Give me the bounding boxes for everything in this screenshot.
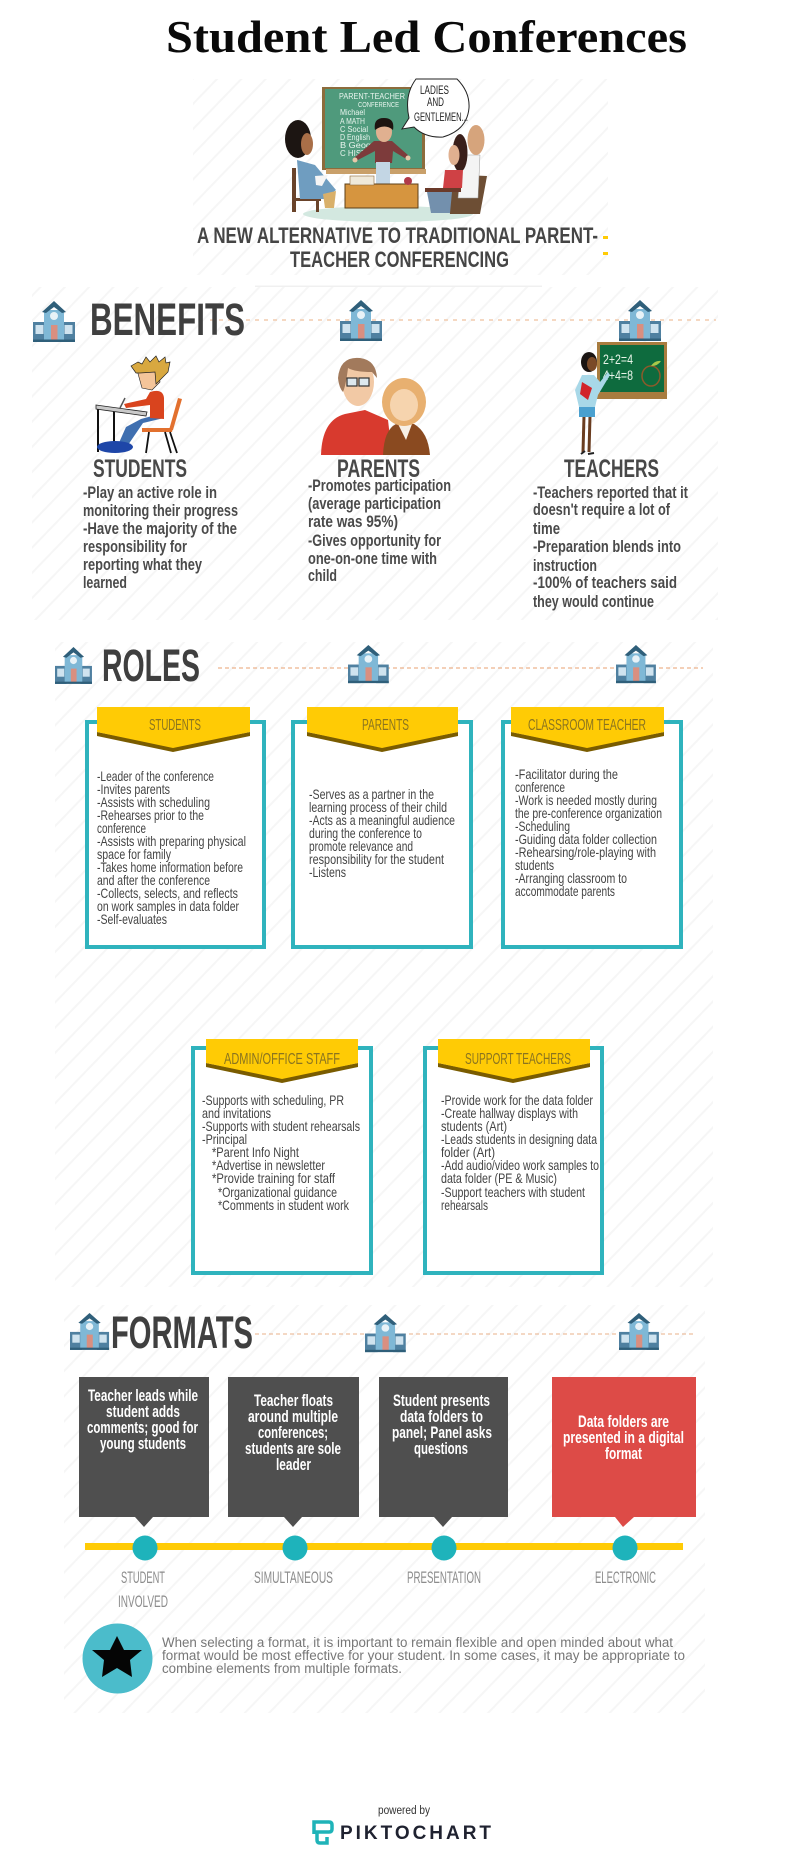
box: teacher floats: conferences;: [258, 1423, 328, 1442]
illustration: teacher at chalkboard: 2+2=4: [603, 351, 633, 367]
illustration: student presenting to parents and teacher: CONFERENCE: [358, 102, 399, 109]
card: parents: -Listens: [309, 864, 346, 880]
illustration: student presenting to parents and teacher: C HIST: [340, 149, 366, 158]
column: teachers: doesn't require a lot of: [533, 500, 670, 519]
timeline: SIMULTANEOUS: [254, 1569, 333, 1587]
icon: star badge: [82, 1624, 152, 1694]
card: admin/office staff: and invitations: [202, 1105, 271, 1121]
card: admin/office staff: *Parent Info Night: [212, 1144, 299, 1160]
card: admin/office staff: *Provide training for staff: [212, 1170, 335, 1186]
card: students: space for family: [97, 846, 171, 862]
box: digital format: presented in a digital: [563, 1428, 684, 1447]
heading: formats: FORMATS: [111, 1307, 253, 1358]
card: classroom teacher: accommodate parents: [515, 883, 615, 899]
card: students: -Invites parents: [97, 781, 170, 797]
card: parents: -Serves as a partner in the: [309, 786, 434, 802]
card: parents: [293, 707, 471, 947]
column: parents: rate was 95%): [308, 512, 398, 531]
card: classroom teacher: conference: [515, 779, 565, 795]
card: classroom teacher: [503, 707, 681, 947]
illustration: teacher at chalkboard: 4+4=8: [603, 367, 633, 383]
column: parents: PARENTS: [337, 455, 420, 483]
box: teacher floats: around multiple: [248, 1407, 338, 1426]
subtitle: TEACHER CONFERENCING: [290, 247, 509, 272]
icon: school: [616, 645, 656, 683]
illustration: student presenting to parents and teacher: AND: [427, 95, 444, 109]
illustration: student presenting to parents and teacher: GENTLEMEN...: [414, 110, 468, 124]
column: students: -Have the majority of the: [83, 519, 237, 538]
title: Student Led Conferences: [166, 12, 687, 62]
card: students: conference: [97, 820, 146, 836]
illustration: student presenting to parents and teacher: Michael: [340, 108, 365, 117]
card: admin/office staff: -Supports with scheduling, PR: [202, 1092, 344, 1108]
card: classroom teacher: the pre-conference organization: [515, 805, 662, 821]
icon: school: [55, 647, 92, 684]
column: teachers: instruction: [533, 556, 597, 575]
card: students: -Leader of the conference: [97, 768, 214, 784]
box: teacher leads: comments; good for: [87, 1418, 198, 1437]
icon: school: [33, 301, 75, 342]
card: admin/office staff: ADMIN/OFFICE STAFF: [224, 1051, 340, 1068]
box: digital format: [552, 1377, 696, 1527]
illustration: student presenting to parents and teacher: C Social: [340, 125, 368, 134]
box: teacher leads: Teacher leads while: [88, 1386, 198, 1405]
box: student presents: panel; Panel asks: [392, 1423, 492, 1442]
column: parents: child: [308, 566, 337, 585]
box: teacher leads: [79, 1377, 209, 1527]
card: admin/office staff: -Principal: [202, 1131, 247, 1147]
card: admin/office staff: *Organizational guidance: [218, 1184, 337, 1200]
card: support teachers: -Support teachers with student: [441, 1184, 585, 1200]
column: parents: one-on-one time with: [308, 549, 437, 568]
card: admin/office staff: -Supports with student rehearsals: [202, 1118, 360, 1134]
column: teachers: -Preparation blends into: [533, 537, 681, 556]
card: parents: promote relevance and: [309, 838, 413, 854]
column: students: [83, 455, 238, 592]
card: students: -Collects, selects, and reflects: [97, 885, 238, 901]
box: digital format: format: [605, 1444, 642, 1463]
footer: powered by piktochart: powered by: [378, 1805, 430, 1817]
illustration: student presenting to parents and teacher: B Geog: [340, 141, 371, 150]
column: students: reporting what they: [83, 555, 202, 574]
column: parents: [308, 455, 451, 585]
column: teachers: TEACHERS: [564, 455, 659, 483]
card: support teachers: -Leads students in designing data: [441, 1131, 597, 1147]
icon: school: [70, 1313, 109, 1350]
panel: benefits: [32, 287, 718, 620]
column: parents: -Gives opportunity for: [308, 531, 441, 550]
card: parents: PARENTS: [362, 717, 409, 734]
card: support teachers: folder (Art): [441, 1144, 495, 1160]
card: admin/office staff: *Comments in student work: [218, 1197, 350, 1213]
footer: powered by piktochart: [314, 1805, 491, 1844]
card: parents: responsibility for the student: [309, 851, 444, 867]
card: admin/office staff: [193, 1039, 371, 1273]
subtitle: [197, 223, 598, 272]
column: teachers: time: [533, 519, 560, 538]
box: teacher leads: young students: [100, 1434, 186, 1453]
box: teacher floats: leader: [276, 1455, 311, 1474]
card: classroom teacher: -Guiding data folder collection: [515, 831, 657, 847]
icon: piktochart logo: [314, 1822, 332, 1843]
illustration: student at desk: [96, 356, 182, 453]
subtitle: A NEW ALTERNATIVE TO TRADITIONAL PARENT-: [197, 223, 598, 248]
column: students: monitoring their progress: [83, 501, 238, 520]
timeline: STUDENT: [121, 1569, 165, 1587]
card: students: -Takes home information before: [97, 859, 243, 875]
card: classroom teacher: CLASSROOM TEACHER: [528, 717, 646, 734]
timeline: [85, 1536, 683, 1611]
card: classroom teacher: -Arranging classroom to: [515, 870, 627, 886]
box: student presents: Student presents: [393, 1391, 490, 1410]
column: parents: (average participation: [308, 494, 441, 513]
illustration: student presenting to parents and teacher: PARENT-TEACHER: [339, 92, 405, 101]
panel: intro: [193, 79, 608, 275]
panel: formats: [64, 1305, 705, 1713]
card: classroom teacher: -Rehearsing/role-playing with: [515, 844, 656, 860]
card: students: -Assists with preparing physical: [97, 833, 246, 849]
note text: When selecting a format, it is important to remain flexible and open minded about what: [162, 1635, 673, 1650]
column: students: -Play an active role in: [83, 483, 217, 502]
icon: school: [348, 645, 389, 683]
card: students: [87, 707, 264, 947]
card: students: on work samples in data folder: [97, 898, 239, 914]
timeline: INVOLVED: [118, 1593, 168, 1611]
card: classroom teacher: -Scheduling: [515, 818, 570, 834]
card: support teachers: [425, 1039, 602, 1273]
box: teacher floats: students are sole: [245, 1439, 341, 1458]
column: teachers: -100% of teachers said: [533, 573, 677, 592]
footer: powered by piktochart: PIKTOCHART: [340, 1823, 491, 1844]
card: parents: -Acts as a meaningful audience: [309, 812, 455, 828]
illustration: student presenting to parents and teacher: A MATH: [340, 117, 365, 126]
illustration: student presenting to parents and teacher: LADIES: [420, 83, 449, 97]
card: support teachers: data folder (PE & Music): [441, 1170, 557, 1186]
column: teachers: -Teachers reported that it: [533, 483, 688, 502]
card: support teachers: -Add audio/video work samples to: [441, 1157, 599, 1173]
box: student presents: data folders to: [400, 1407, 483, 1426]
box: student presents: [379, 1377, 508, 1527]
card: classroom teacher: students: [515, 857, 554, 873]
column: teachers: [533, 455, 688, 611]
card: students: and after the conference: [97, 872, 210, 888]
note text: [162, 1635, 685, 1676]
card: classroom teacher: -Facilitator during the: [515, 766, 618, 782]
timeline: ELECTRONIC: [595, 1569, 656, 1587]
column: students: learned: [83, 573, 127, 592]
card: support teachers: students (Art): [441, 1118, 507, 1134]
icon: school: [619, 300, 661, 341]
note text: format would be most effective for your student. In some cases, it may be appropriate to: [162, 1648, 685, 1663]
illustration: student presenting to parents and teacher: D English: [340, 133, 370, 142]
timeline: PRESENTATION: [407, 1569, 481, 1587]
box: digital format: Data folders are: [578, 1412, 669, 1431]
card: students: -Rehearses prior to the: [97, 807, 204, 823]
box: teacher leads: student adds: [106, 1402, 180, 1421]
illustration: student presenting to parents and teacher: [285, 79, 487, 222]
card: students: STUDENTS: [149, 717, 201, 734]
illustration: parents: [321, 358, 430, 455]
heading: benefits: BENEFITS: [90, 294, 245, 345]
card: admin/office staff: *Advertise in newsletter: [212, 1157, 325, 1173]
icon: school: [365, 1314, 406, 1352]
column: parents: -Promotes participation: [308, 476, 451, 495]
card: classroom teacher: -Work is needed mostly during: [515, 792, 657, 808]
box: teacher floats: [228, 1377, 359, 1527]
heading: roles: ROLES: [102, 640, 200, 691]
illustration: teacher at chalkboard: [575, 342, 667, 454]
column: teachers: they would continue: [533, 592, 654, 611]
card: parents: during the conference to: [309, 825, 422, 841]
card: parents: learning process of their child: [309, 799, 447, 815]
panel: roles: [55, 640, 713, 1287]
icon: school: [340, 300, 382, 341]
card: students: -Assists with scheduling: [97, 794, 210, 810]
icon: school: [619, 1313, 659, 1350]
box: student presents: questions: [414, 1439, 468, 1458]
box: teacher floats: Teacher floats: [254, 1391, 333, 1410]
column: students: responsibility for: [83, 537, 187, 556]
card: support teachers: rehearsals: [441, 1197, 488, 1213]
card: support teachers: SUPPORT TEACHERS: [465, 1051, 571, 1068]
column: students: STUDENTS: [93, 455, 187, 483]
card: support teachers: -Provide work for the data folder: [441, 1092, 593, 1108]
card: support teachers: -Create hallway displays with: [441, 1105, 578, 1121]
note text: combine elements from multiple formats.: [162, 1661, 402, 1676]
card: students: -Self-evaluates: [97, 911, 167, 927]
